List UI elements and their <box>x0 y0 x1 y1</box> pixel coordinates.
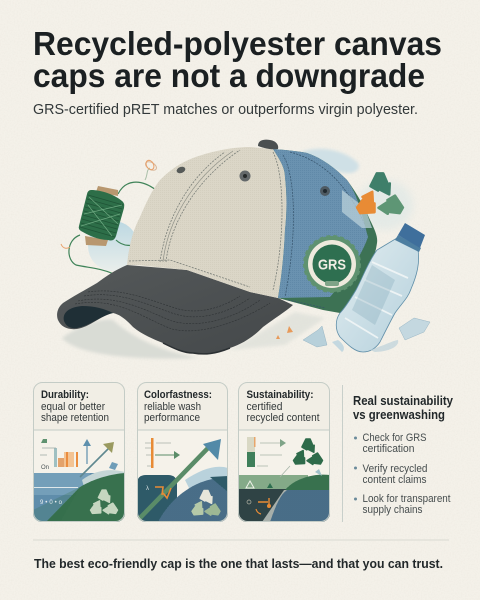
heading: colorfastness: Colorfastness: <box>144 389 212 401</box>
bullet list: Check for GRS <box>362 432 426 444</box>
panel: real sustainability vs greenwashing <box>353 394 453 516</box>
heading: durability: Durability: <box>41 389 89 401</box>
illustration: bar chart and fabric: On <box>41 465 49 471</box>
text: durability detail <box>41 401 109 424</box>
icon: green thread spool <box>61 159 158 274</box>
bullet list: Verify recycled <box>362 463 428 475</box>
panel: sustainability <box>238 382 330 522</box>
illustration: bar chart and fabric: 9 • 0 • o <box>40 500 63 506</box>
text: colorfastness detail: performance <box>144 412 200 424</box>
illustration: wash arrow and denim: λ <box>146 486 149 492</box>
bullet list <box>354 432 450 516</box>
illustration: recycled cap with spool and bottle <box>57 140 430 359</box>
text: sustainability detail <box>246 401 320 424</box>
footer takeaway: The best eco-friendly cap is the one that lasts—and that you can trust. <box>34 557 443 571</box>
text: sustainability detail: certified <box>246 401 282 413</box>
eyelets and top button <box>176 140 330 196</box>
text: durability detail: equal or better <box>41 401 105 413</box>
cap crown: blue and green panels <box>273 149 377 313</box>
bullet list: Look for transparent <box>362 493 450 505</box>
subtitle: GRS-certified pRET matches or outperforms virgin polyester. <box>33 101 418 118</box>
bullet list: supply chains <box>362 504 423 516</box>
text: colorfastness detail <box>144 401 201 424</box>
heading: real sustainability: Real sustainability <box>353 394 453 408</box>
icon: plastic bottle <box>276 223 430 352</box>
cap visor <box>57 265 293 354</box>
icon: recycling arrows <box>354 173 406 219</box>
bullet list: content claims <box>362 474 427 486</box>
title: Recycled-polyester canvas <box>33 26 442 63</box>
heading: real sustainability: vs greenwashing <box>353 408 445 422</box>
watercolor washes <box>62 149 413 359</box>
bullet list: certification <box>362 443 414 455</box>
text: colorfastness detail: reliable wash <box>144 401 201 413</box>
cap crown: canvas panel <box>127 147 286 298</box>
heading: sustainability: Sustainability: <box>246 389 314 401</box>
panel: durability <box>33 382 125 522</box>
heading: real sustainability <box>353 394 453 422</box>
icon: GRS badge <box>304 236 360 292</box>
title: caps are not a downgrade <box>33 58 425 95</box>
title <box>33 26 442 95</box>
text: sustainability detail: recycled content <box>246 412 320 424</box>
illustration: certification and recycling <box>238 430 330 522</box>
icon: GRS badge: GRS <box>318 256 346 274</box>
illustration: bar chart and fabric <box>33 430 125 522</box>
panel: colorfastness <box>137 382 228 522</box>
text: durability detail: shape retention <box>41 412 109 424</box>
